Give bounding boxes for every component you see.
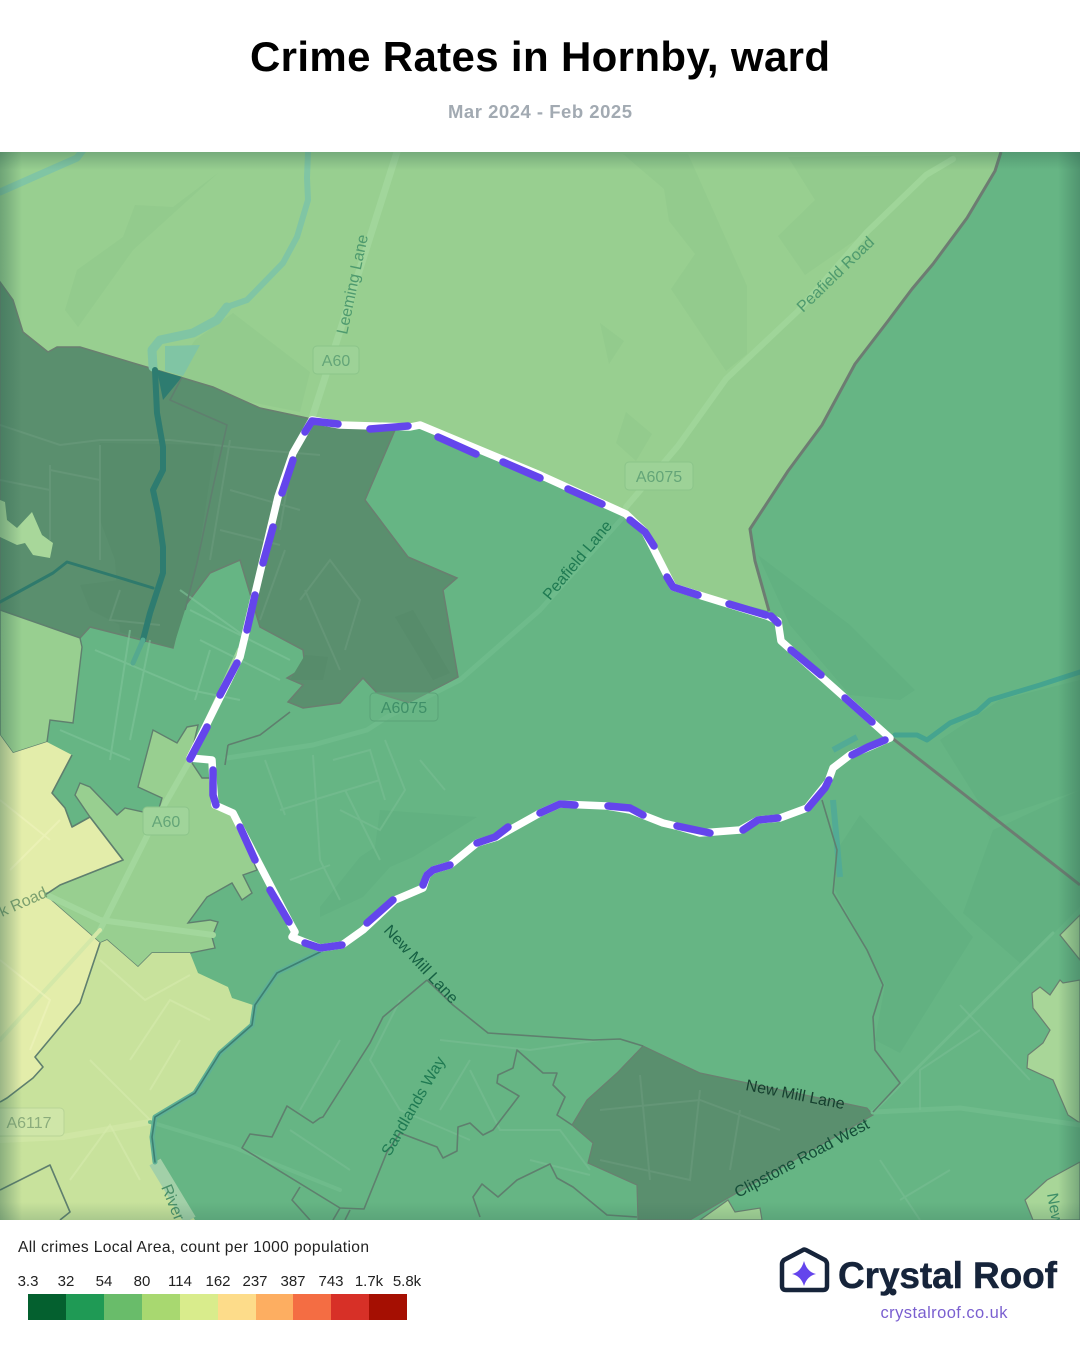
legend scale values: 5.8k [393, 1273, 422, 1290]
road label: New Mill Lane west: New Mill Lane [380, 922, 461, 1007]
street network [0, 425, 1030, 1220]
area: eastern pale pockets [700, 915, 1080, 1220]
road: Peafield Road [626, 159, 953, 507]
ward outline: white base [190, 420, 890, 948]
ward outline: Hornby [190, 420, 890, 948]
road badge: A6075 east: A6075 [636, 469, 682, 486]
legend scale values: 743 [318, 1273, 344, 1290]
legend title: All crimes Local Area, count per 1000 population [18, 1239, 369, 1256]
river: dark triangle at dark-zone edge [157, 370, 182, 400]
choropleth map [0, 150, 1080, 1227]
logo wordmark: Crystal Roof [838, 1255, 1058, 1296]
legend colour bar [28, 1294, 407, 1320]
river: ward channel pieces [833, 737, 857, 877]
streets: south-east estate [600, 1075, 780, 1180]
road badge: A6117: A6117 [6, 1115, 52, 1132]
road: A6117 east [148, 1120, 152, 1124]
streets: southern estates [290, 1000, 600, 1175]
road badge: A6117 [0, 1108, 64, 1136]
icon: y-tail keyhole dot [890, 1288, 896, 1296]
road label: Peafield Road: Peafield Road [794, 234, 878, 316]
area: light gap inside dark zone [0, 500, 53, 558]
river: west tributary [0, 562, 153, 602]
road label: Clipstone Road West: Clipstone Road West [732, 1116, 873, 1202]
title: Crime Rates in Hornby, ward [250, 33, 830, 80]
legend scale values [18, 1273, 422, 1290]
river: northern loop [152, 307, 227, 367]
legend scale values: 387 [280, 1273, 306, 1290]
road label: New Mill Lane east: New Mill Lane [744, 1077, 846, 1113]
boundary: southern area top [427, 980, 643, 1046]
area: yellow-green low-crime zone [0, 735, 123, 1102]
area: south-east dark zone [572, 1046, 873, 1220]
river: northern stream [227, 152, 308, 307]
area: west light-green strip [0, 610, 82, 753]
area: darker core of the dark zone [160, 604, 306, 680]
area: northern light-green zone [0, 152, 1001, 611]
boundary: east thick line [750, 152, 1001, 611]
road badge: A6075 east [625, 462, 693, 490]
area: central-west light-green zone [45, 725, 257, 967]
road: New Mill Lane east link [873, 933, 1053, 1112]
road badge: A60 north: A60 [322, 353, 350, 370]
boundary: southern lower estate [292, 1164, 637, 1220]
road: Peafield Lane and A6075 [408, 682, 450, 704]
river band: River Maun [155, 1162, 190, 1220]
road badge: A6075 centre: A6075 [381, 700, 427, 717]
logo: Crystal Roof [782, 1250, 1058, 1322]
area: slightly darker wooded patches [320, 555, 1080, 1053]
road: A60 north [312, 152, 397, 418]
river: south-west channel [152, 952, 320, 1162]
road badge: A6075 centre [370, 693, 438, 721]
rivers [0, 150, 1080, 1162]
streets: ward estate [265, 740, 445, 900]
streets: south-west pale zone [70, 960, 210, 1180]
legend scale values: 80 [134, 1273, 150, 1290]
legend [18, 1239, 422, 1320]
streets: western estate [60, 590, 290, 760]
road: east-west link [47, 895, 213, 935]
boundary: yellow-pale divider [0, 817, 123, 1102]
legend scale values: 1.7k [355, 1273, 384, 1290]
legend scale values: 162 [205, 1273, 231, 1290]
river: north-west stream through dark zone [143, 370, 163, 640]
road: A60 south [100, 650, 240, 930]
road label: River: River [157, 1182, 187, 1224]
map edge fade [0, 152, 1080, 1220]
boundary: south-east area [822, 800, 900, 1112]
road: A60 into yellow zone [0, 930, 100, 1040]
streets: north-west estate [0, 425, 360, 670]
road badge: A60 south [143, 807, 189, 835]
area: north-west dark high-crime zone [0, 282, 458, 708]
boundary: dark zone inner divider [170, 377, 227, 610]
area boundaries [0, 152, 1080, 1220]
streets: south-east residential [880, 1005, 1030, 1220]
legend scale values: 237 [242, 1273, 268, 1290]
area: farmland patches in the north [65, 154, 953, 461]
roads [0, 152, 1080, 1220]
legend scale values: 54 [96, 1273, 112, 1290]
legend scale values: 32 [58, 1273, 74, 1290]
boundary: south-east thick line [892, 738, 1080, 885]
road label: Sandlands Way: Sandlands Way [379, 1054, 449, 1159]
road: Clipstone Road [873, 1108, 1080, 1125]
website url: crystalroof.co.uk [880, 1304, 1008, 1322]
boundary: pale zone divider [0, 1165, 70, 1220]
road label: Peafield Lane: Peafield Lane [540, 518, 616, 604]
river: lower tail [133, 640, 143, 663]
area: wedge east of Peafield Road [752, 606, 766, 610]
area: south-west pale green zone [0, 940, 253, 1220]
river: eastern river [895, 672, 1080, 740]
subtitle: date range: Mar 2024 - Feb 2025 [448, 101, 632, 122]
map base: mid-green crime area [0, 152, 1080, 1220]
road label: New (east edge): New [1043, 1192, 1065, 1227]
ward outline: violet dashes [190, 421, 885, 948]
streets: yellow zone [7, 806, 60, 1050]
river: north-west corner [0, 150, 83, 192]
lake: north-west pond [165, 345, 200, 376]
legend scale values: 114 [168, 1273, 192, 1290]
boundary: ward western stub [52, 712, 290, 827]
road: A6117 [0, 1122, 150, 1140]
legend scale values: 3.3 [18, 1273, 38, 1290]
road label: Leeming Lane: Leeming Lane [334, 233, 372, 336]
icon: house with star [782, 1250, 827, 1290]
boundary: south estates diagonal [242, 980, 572, 1209]
road badge: A60 south: A60 [152, 814, 180, 831]
river: south-west channel core [152, 952, 320, 1162]
road badge: A60 north [313, 346, 359, 374]
